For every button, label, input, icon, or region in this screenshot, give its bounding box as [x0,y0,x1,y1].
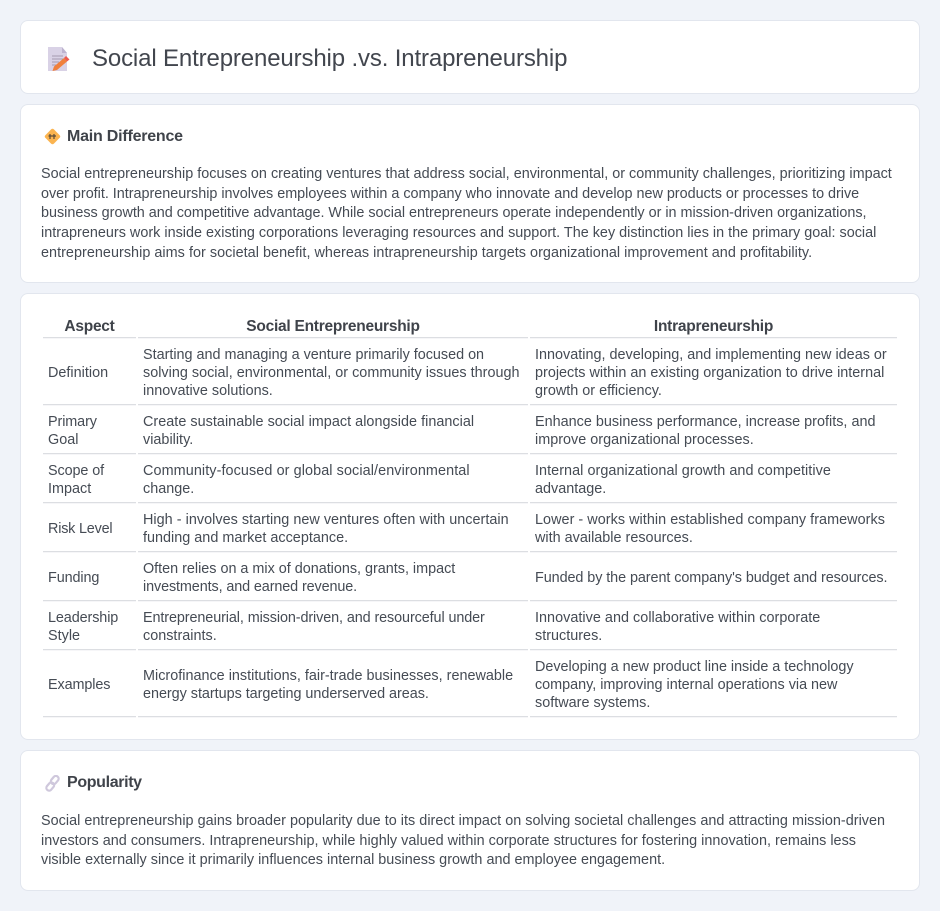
text block: main difference paragraph: business growth and competitive advantage. While social entrepreneurs operate independently or in mission-driven organizations, [41,205,866,221]
row: definition: growth or efficiency. [535,383,662,399]
row: risk level: funding and market acceptance. [143,530,348,546]
row: examples: Microfinance institutions, fair-trade businesses, renewable [143,668,513,684]
row: examples: company, improving internal operations via new [535,677,837,693]
row: examples: energy startups targeting underserved areas. [143,686,429,702]
row: primary goal: Create sustainable social impact alongside financial [143,414,474,430]
panel: popularity [20,750,920,891]
row: leadership style: structures. [535,628,602,644]
row: scope of impact: Impact [48,481,91,497]
row: risk level: with available resources. [535,530,693,546]
row: scope of impact: change. [143,481,194,497]
row: funding: Funded by the parent company's budget and resources. [535,570,887,586]
row: funding: Often relies on a mix of donations, grants, impact [143,561,455,577]
text block: main difference paragraph: intrapreneurs work inside existing corporations leveraging resources and support. The key distinction lies in the primary goal: social [41,225,876,241]
row: leadership style: Leadership [48,610,118,626]
row: scope of impact: advantage. [535,481,606,497]
icon: chain link [45,775,60,792]
text block: popularity paragraph: Social entrepreneurship gains broader popularity due to its direct impact on solving societal challenges and attracting mission-driven [41,813,885,829]
text block: main difference paragraph: over profit. Intrapreneurship involves employees within a company who innovate and develop new products or processes to drive [41,186,859,202]
row: risk level: Lower - works within established company frameworks [535,512,885,528]
row: leadership style: Innovative and collaborative within corporate [535,610,820,626]
row: leadership style: constraints. [143,628,217,644]
icon: warning diamond [44,128,60,144]
row: primary goal: improve organizational processes. [535,432,754,448]
row: definition: solving social, environmental, or community issues through [143,365,520,381]
row: examples: Developing a new product line inside a technology [535,659,854,675]
row: examples: software systems. [535,695,650,711]
row: definition: innovative solutions. [143,383,273,399]
row: risk level: Risk Level [48,521,112,537]
row: scope of impact: Community-focused or global social/environmental [143,463,470,479]
row: funding: investments, and earned revenue. [143,579,357,595]
text block: popularity paragraph: investors and consumers. Intrapreneurship, while highly valued within corporate structures for fostering innovation, remains less [41,833,856,849]
row: primary goal: Primary [48,414,97,430]
icon: document with pencil [48,47,70,71]
row: risk level: High - involves starting new ventures often with uncertain [143,512,509,528]
row: funding: Funding [48,570,99,586]
text block: main difference paragraph: Social entrepreneurship focuses on creating ventures that address social, environmental, or community challenges, prioritizing impact [41,166,892,182]
text block: main difference paragraph: entrepreneurship aims for societal benefit, whereas intrapreneurship targets organizational improvement and profitability. [41,245,812,261]
table header row: Intrapreneurship [654,318,773,335]
table header row: Aspect [64,318,115,335]
heading: popularity: Popularity [67,774,142,791]
row: definition: Definition [48,365,108,381]
row: definition: projects within an existing organization to drive internal [535,365,884,381]
row: primary goal: viability. [143,432,193,448]
panel: header [20,20,920,94]
heading: main difference: Main Difference [67,128,183,145]
row: leadership style: Entrepreneurial, mission-driven, and resourceful under [143,610,485,626]
row: leadership style: Style [48,628,80,644]
table header row [43,318,897,338]
table header row: Social Entrepreneurship [246,318,420,335]
row: definition: Innovating, developing, and implementing new ideas or [535,347,887,363]
row: primary goal: Goal [48,432,78,448]
row: examples: Examples [48,677,110,693]
text block: popularity paragraph [41,813,885,868]
row: primary goal: Enhance business performance, increase profits, and [535,414,875,430]
row: scope of impact: Scope of [48,463,104,479]
text block: main difference paragraph [41,166,892,261]
panel: comparison table [20,293,920,740]
row: scope of impact: Internal organizational growth and competitive [535,463,831,479]
text block: popularity paragraph: visible externally since it primarily influences internal business growth and employee engagement. [41,852,665,868]
title: Social Entrepreneurship .vs. Intrapreneurship [92,45,567,72]
row: definition: Starting and managing a venture primarily focused on [143,347,484,363]
panel: main difference [20,104,920,283]
